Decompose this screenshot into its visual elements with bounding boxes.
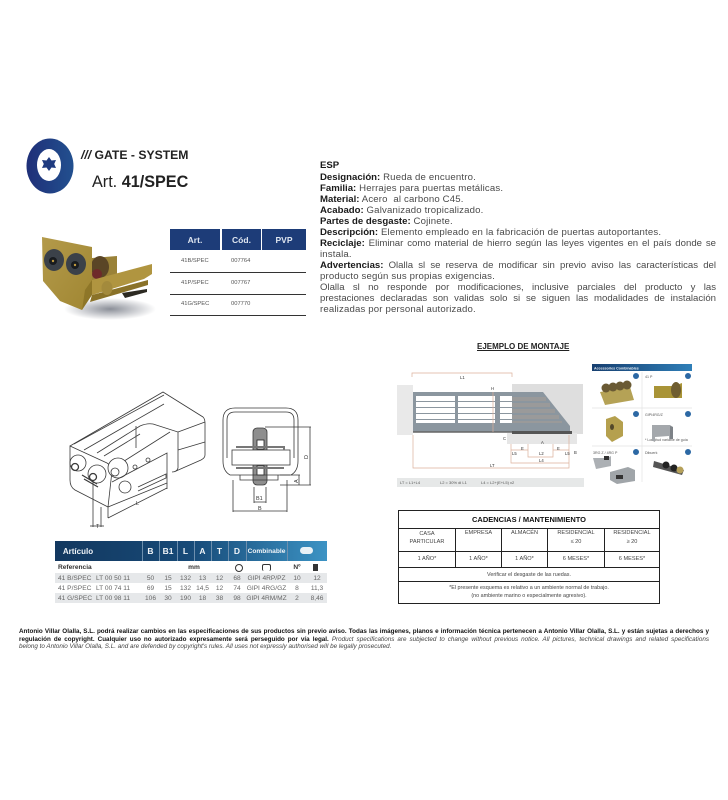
header band: B1 bbox=[163, 546, 173, 556]
value: 6 meses residencial 2 bbox=[605, 552, 659, 568]
footer: legal notice: regulación de copyright. Cualquier uso no autorizado expresamente será perseguido por vía legal. Product specifications are subjected to change without previous notice. All pictures, technical drawings and related specifications bbox=[19, 636, 709, 643]
row 41G: 007770 bbox=[231, 301, 250, 307]
diagram: sliding gate installation: L2 = 30% di L1 bbox=[440, 480, 468, 485]
title: gate system: /// GATE - SYSTEM bbox=[81, 148, 188, 162]
diagram: sliding gate installation: C bbox=[503, 436, 506, 441]
row 41B: 007764 bbox=[231, 258, 250, 264]
row 41 B: 50 bbox=[147, 575, 154, 582]
value: 6 meses residencial 2: 6 MESES* bbox=[619, 556, 645, 562]
value: 1 ano almacen bbox=[502, 552, 548, 568]
product photo: gold wheel bracket bbox=[42, 237, 152, 319]
icon: brand logo bbox=[26, 138, 74, 194]
text block: product specification: instala. bbox=[320, 249, 352, 260]
cell: residencial over 20: ≥ 20 bbox=[627, 539, 637, 545]
panel: combinable accessories bbox=[592, 364, 692, 484]
row 41G bbox=[170, 294, 306, 316]
row 41 P: 41 P/SPEC bbox=[58, 585, 91, 592]
row 41 G: 8,46 bbox=[311, 595, 323, 602]
technical drawing: isometric and section bbox=[70, 392, 311, 530]
cell: almacen bbox=[502, 529, 548, 552]
row 41 P: 11,3 bbox=[311, 585, 323, 592]
cell: residencial over 20 bbox=[605, 529, 659, 552]
header band: Combinable bbox=[248, 548, 285, 555]
diagram: sliding gate installation: LT = L1+L4 bbox=[400, 480, 421, 485]
note: environment: (no ambiente marino o especialmente agresivo). bbox=[471, 593, 587, 599]
technical drawing: isometric and section: A bbox=[294, 479, 300, 483]
units row: Nº bbox=[293, 564, 301, 571]
panel: combinable accessories: 3RG Z / 4RG P bbox=[593, 451, 618, 455]
value: 1 ano empresa bbox=[456, 552, 502, 568]
panel: combinable accessories: 41 P bbox=[645, 375, 653, 379]
text block: product specification: producto según sus propias exigencias. bbox=[320, 271, 495, 282]
section view bbox=[223, 408, 311, 512]
value: 1 ano empresa: 1 AÑO* bbox=[469, 556, 488, 562]
row 41 B bbox=[55, 573, 327, 583]
row 41 G: 98 bbox=[233, 595, 241, 602]
table: technical data bbox=[55, 541, 327, 603]
row 41P: 007767 bbox=[231, 280, 250, 286]
row 41B bbox=[170, 251, 306, 273]
row 41 B: 41 B/SPEC bbox=[58, 575, 91, 582]
isometric view bbox=[70, 392, 205, 527]
header band: D bbox=[234, 546, 240, 556]
units row: Referencia bbox=[58, 564, 92, 571]
row 41 G: 38 bbox=[216, 595, 223, 602]
header: cod bbox=[222, 229, 261, 250]
cell: casa particular: PARTICULAR bbox=[410, 539, 444, 545]
table title bbox=[399, 511, 659, 529]
cell: casa particular bbox=[399, 529, 456, 552]
header: cod: Cód. bbox=[232, 235, 251, 245]
header: pvp: PVP bbox=[275, 235, 292, 245]
title: article code: Art. 41/SPEC bbox=[92, 173, 188, 191]
heading: mounting example: EJEMPLO DE MONTAJE bbox=[477, 342, 569, 351]
text block: product specification: Designación: Rueda de encuentro. bbox=[320, 172, 476, 183]
header: pvp bbox=[262, 229, 306, 250]
note: wheel wear: Verificar el desgaste de las ruedas. bbox=[487, 572, 571, 578]
row 41 B: 68 bbox=[233, 575, 241, 582]
row 41 B: LT 00 50 11 bbox=[96, 575, 130, 582]
table title: CADENCIAS / MANTENIMIENTO bbox=[472, 515, 586, 524]
header: art: Art. bbox=[188, 235, 202, 245]
row 41 P bbox=[58, 585, 323, 592]
row 41 B: 12 bbox=[313, 575, 321, 582]
cell: empresa: EMPRESA bbox=[465, 530, 492, 536]
row 41B: 41B/SPEC bbox=[181, 258, 209, 264]
row 41 G: 106 bbox=[145, 595, 156, 602]
row 41 P: 14,5 bbox=[196, 585, 209, 592]
units row bbox=[58, 564, 318, 572]
table: maintenance schedule bbox=[398, 510, 660, 604]
row 41 P: 132 bbox=[180, 585, 191, 592]
text block: product specification: Reciclaje: Eliminar como material de hierro según las leyes vigentes en el país donde se bbox=[320, 238, 716, 249]
row 41 P: LT 00 74 11 bbox=[96, 585, 130, 592]
note: environment: *El presente esquema es relativo a un ambiente normal de trabajo. bbox=[449, 585, 609, 591]
technical drawing: isometric and section: T bbox=[96, 524, 100, 530]
text block: product specification: Partes de desgaste: Cojinete. bbox=[320, 216, 453, 227]
technical drawing: isometric and section: B bbox=[258, 506, 262, 512]
header: art bbox=[170, 229, 220, 250]
row 41 B: 10 bbox=[293, 575, 301, 582]
value: 1 ano almacen: 1 AÑO* bbox=[515, 556, 534, 562]
diagram: sliding gate installation: E bbox=[521, 446, 524, 451]
row 41 B: GIPI 4RP/PZ bbox=[247, 575, 286, 582]
text block: product specification: Olalla sl no responde por modificaciones, inclusive parciales del producto y las bbox=[320, 282, 716, 293]
cell: almacen: ALMACÉN bbox=[511, 530, 538, 536]
cell: empresa bbox=[456, 529, 502, 552]
panel: combinable accessories: * Longitud variable de guía bbox=[645, 438, 688, 442]
row 41 B: 15 bbox=[164, 575, 172, 582]
diagram: sliding gate installation: L4 = L2+(E+L5) x2 bbox=[481, 480, 515, 485]
row 41 P: 69 bbox=[147, 585, 154, 592]
diagram: sliding gate installation: E bbox=[557, 446, 560, 451]
diagram: sliding gate installation: B bbox=[574, 450, 577, 455]
row 41 G: 41 G/SPEC bbox=[58, 595, 92, 602]
text block: product specification: prestaciones declaradas son validas solo si se siguen las modalidades de instalación bbox=[320, 293, 716, 304]
diagram: sliding gate installation: LT bbox=[490, 463, 495, 468]
cell: residencial under 20: RESIDENCIAL bbox=[557, 530, 595, 536]
header band: T bbox=[217, 546, 222, 556]
row 41 G: 30 bbox=[164, 595, 172, 602]
row 41 P: 12 bbox=[216, 585, 223, 592]
panel: combinable accessories: Dibuerk bbox=[645, 451, 658, 455]
diagram: sliding gate installation: H bbox=[491, 386, 494, 391]
footer: legal notice: belong to Antonio Villar Olalla, S.L. and are defended by copyright's rules. All uses not expressly authorised will be legally prosecuted. bbox=[19, 643, 391, 650]
row 41 B: 13 bbox=[199, 575, 206, 582]
panel: combinable accessories: Accessories Combinables bbox=[594, 366, 639, 370]
cell: residencial under 20 bbox=[548, 529, 605, 552]
row 41 G: 2 bbox=[295, 595, 299, 602]
row 41G: 41G/SPEC bbox=[181, 301, 209, 307]
header band: A bbox=[199, 546, 206, 556]
table: article codes bbox=[170, 229, 306, 316]
value: 1 ano casa: 1 AÑO* bbox=[418, 556, 436, 562]
text block: product specification: Acabado: Galvanizado tropicalizado. bbox=[320, 205, 484, 216]
diagram: sliding gate installation: A bbox=[541, 440, 544, 445]
row 41 B: 132 bbox=[180, 575, 191, 582]
diagram: sliding gate installation bbox=[397, 372, 584, 487]
row 41 P: 8 bbox=[295, 585, 299, 592]
technical drawing: isometric and section: L bbox=[136, 501, 139, 507]
row 41 G: LT 00 98 11 bbox=[96, 595, 130, 602]
value: 1 ano casa bbox=[399, 552, 456, 568]
text block: product specification: Advertencias: Olalla sl se reserva de modificar sin previo aviso las características del bbox=[320, 260, 716, 271]
panel: combinable accessories: GIPI4RG/Z bbox=[645, 413, 664, 417]
text block: product specification: ESP bbox=[320, 160, 339, 171]
value: 6 meses residencial bbox=[548, 552, 605, 568]
cell: casa particular: CASA bbox=[419, 531, 435, 537]
diagram: sliding gate installation: L1 bbox=[460, 375, 465, 380]
header band bbox=[55, 541, 327, 561]
diagram: sliding gate installation: L2 bbox=[539, 451, 544, 456]
note: environment bbox=[449, 585, 609, 599]
note: wheel wear bbox=[399, 568, 659, 582]
technical drawing: isometric and section: D bbox=[304, 455, 310, 459]
footer: legal notice: Antonio Villar Olalla, S.L. podrá realizar cambios en las especificaciones de sus productos sin previo aviso. Todas las imágenes, planos e información técnica pertenecen a Antonio Villar Olalla, S.L. y están sujetas a derechos y bbox=[19, 628, 709, 635]
row 41 P: 74 bbox=[233, 585, 241, 592]
technical drawing: isometric and section: B1 bbox=[256, 496, 263, 502]
text block: product specification: Descripción: Elemento empleado en la fabricación de puertas autoportantes. bbox=[320, 227, 661, 238]
row 41P: 41P/SPEC bbox=[181, 280, 209, 286]
cell: residencial over 20: RESIDENCIAL bbox=[613, 530, 651, 536]
diagram: sliding gate installation: L5 bbox=[512, 451, 517, 456]
units row: mm bbox=[188, 564, 200, 571]
cell: residencial under 20: ≤ 20 bbox=[571, 539, 581, 545]
footer: legal notice bbox=[19, 628, 709, 650]
row 41 P: GIPI 4RG/GZ bbox=[247, 585, 286, 592]
header band: B bbox=[147, 546, 154, 556]
text block: product specification: Material: Acero al carbono C45. bbox=[320, 194, 464, 205]
row 41 G bbox=[55, 593, 327, 603]
row 41 P: 15 bbox=[164, 585, 172, 592]
row 41 G: 190 bbox=[180, 595, 191, 602]
row 41 G: 18 bbox=[199, 595, 206, 602]
value: 6 meses residencial: 6 MESES* bbox=[563, 556, 589, 562]
diagram: sliding gate installation: L5 bbox=[565, 451, 570, 456]
header band: L bbox=[183, 546, 188, 556]
row 41 G: GIPI 4RM/MZ bbox=[246, 595, 287, 602]
text block: product specification: realizadas por personal autorizado. bbox=[320, 304, 476, 315]
text block: product specification bbox=[320, 160, 716, 315]
diagram: sliding gate installation: L4 bbox=[539, 458, 544, 463]
row 41P bbox=[170, 273, 306, 295]
text block: product specification: Familia: Herrajes para puertas metálicas. bbox=[320, 183, 503, 194]
header band: Artículo bbox=[63, 547, 93, 556]
row 41 B: 12 bbox=[216, 575, 223, 582]
